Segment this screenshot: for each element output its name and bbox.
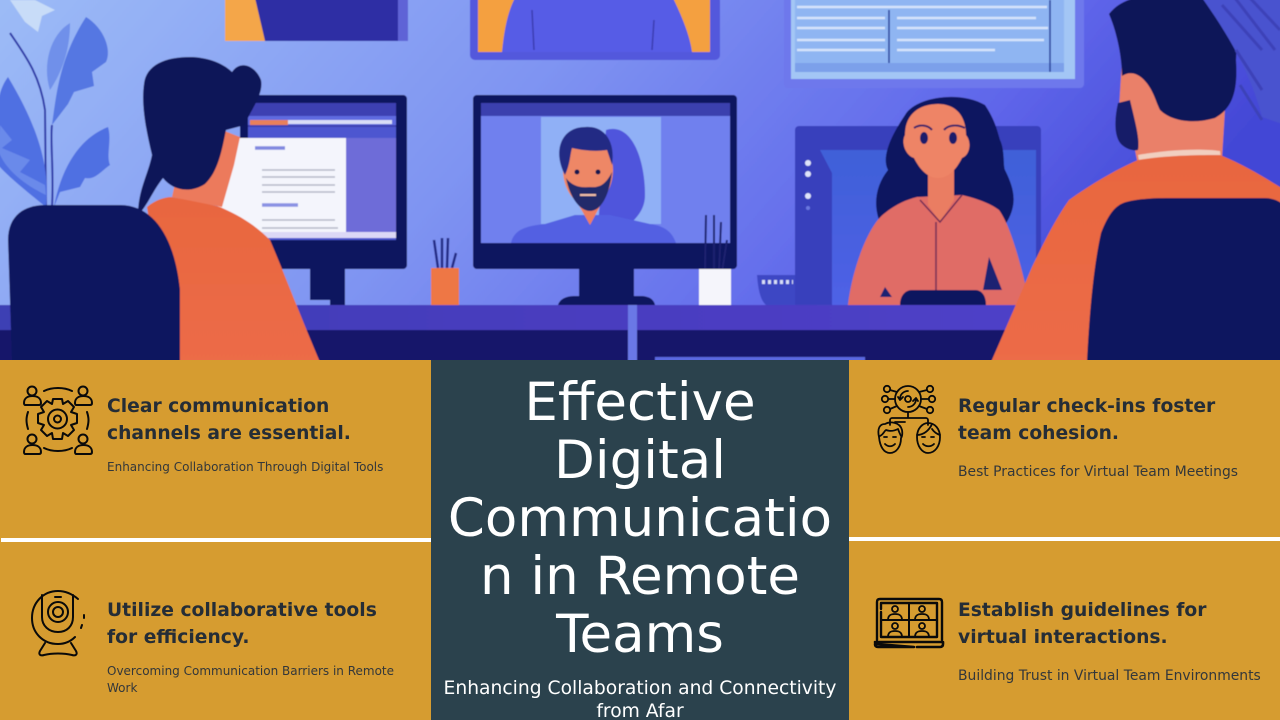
heading: channels are essential. [107,423,351,444]
title: Effective [524,372,756,433]
seated man from behind, right [991,0,1280,362]
subtitle [444,678,836,720]
heading: Regular check-ins foster [958,396,1215,417]
heading [107,600,377,648]
pencil cup [431,238,459,305]
heading: virtual interactions. [958,627,1168,648]
monitor: behind seated woman [795,126,1041,308]
monitor: centre with video call [473,95,737,305]
heading: Establish guidelines for [958,600,1207,621]
panel: top left takeaway [0,360,431,540]
mug [757,275,795,305]
panel: top right takeaway [849,360,1280,537]
panel: bottom left takeaway [0,540,431,720]
subtext: Best Practices for Virtual Team Meetings [958,464,1238,480]
heading: Clear communication [107,396,329,417]
wall [0,0,1280,365]
icon: laptop with video grid [874,598,944,648]
heading: Utilize collaborative tools [107,600,377,621]
subtext: Enhancing Collaboration Through Digital Tools [107,460,383,474]
hero illustration: video meeting scene [0,0,1280,360]
heading: team cohesion. [958,423,1119,444]
title: n in Remote [480,546,800,607]
divider: left column [1,538,431,542]
title [448,372,832,665]
title: Teams [556,604,724,665]
subtext: Overcoming Communication Barriers in Remote Work [107,664,394,695]
white pen cup [699,215,731,306]
monitor: left [218,95,407,305]
title: Digital [554,430,726,491]
heading [107,396,351,444]
panel: bottom right takeaway [849,540,1280,720]
panel: centre title [431,360,849,720]
subtitle: Enhancing Collaboration and Connectivity [444,678,836,699]
icon: check-in network with two people [878,384,941,454]
frame: document on wall [784,0,1084,88]
heading [958,600,1207,648]
divider: right column [849,537,1280,541]
frame: top centre video [470,0,720,60]
icon: webcam [31,590,85,656]
right plant [1200,0,1280,125]
seated woman [848,97,1030,305]
heading: for efficiency. [107,627,249,648]
icon: team around gear [23,386,93,455]
seated person from behind, left [8,57,320,362]
title: Communicatio [448,488,832,549]
heading [958,396,1216,444]
left plant [0,0,110,207]
subtext: Building Trust in Virtual Team Environments [958,668,1261,684]
desk [0,305,1058,362]
frame: top left video [225,0,408,41]
